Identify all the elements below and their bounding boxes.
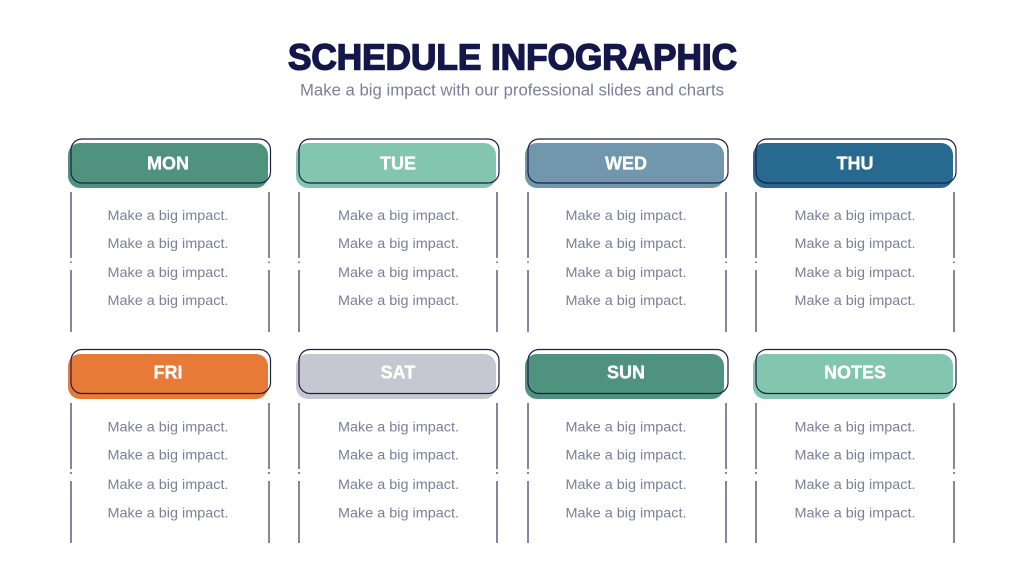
text block [338, 208, 459, 308]
header: SUN: SUN [607, 362, 645, 382]
side lines [528, 403, 726, 543]
text block: Make a big impact. [794, 265, 916, 280]
panel: NOTES [753, 350, 956, 543]
text block: Make a big impact. [338, 477, 459, 492]
text block: Make a big impact. [338, 506, 459, 520]
text block [794, 208, 916, 308]
text block: Make a big impact. [566, 208, 686, 223]
header: TUE: TUE [380, 154, 416, 174]
text block: Make a big impact. [338, 293, 459, 308]
panel: MON [68, 139, 270, 332]
header: SUN [525, 350, 728, 399]
header: NOTES: NOTES [824, 362, 886, 382]
text block: Make a big impact. [108, 265, 228, 280]
header: WED: WED [605, 154, 647, 174]
text block: Make a big impact. [794, 448, 916, 462]
text block: Make a big impact. [794, 420, 916, 434]
header: MON [68, 139, 270, 188]
text block: Make a big impact. [566, 265, 686, 280]
text block: Make a big impact. [338, 420, 459, 434]
side lines [299, 192, 497, 332]
header: THU: THU [836, 154, 874, 174]
text block: Make a big impact. [108, 477, 228, 492]
subtitle: Make a big impact with our professional slides and charts [300, 82, 724, 100]
text block: Make a big impact. [566, 448, 686, 462]
header: WED [525, 139, 728, 188]
text block: Make a big impact. [108, 293, 228, 308]
panel: TUE [296, 139, 499, 332]
text block: Make a big impact. [338, 236, 459, 251]
text block: Make a big impact. [566, 420, 686, 434]
header: MON: MON [147, 154, 189, 174]
header: TUE [296, 139, 499, 188]
text block: Make a big impact. [108, 420, 228, 434]
panel: SUN [525, 350, 728, 543]
text block [338, 420, 459, 520]
side lines [528, 192, 726, 332]
title: SCHEDULE INFOGRAPHIC [288, 36, 737, 78]
header: FRI: FRI [154, 362, 182, 382]
text block [566, 208, 686, 308]
header: FRI [68, 350, 270, 399]
text block [108, 420, 228, 520]
side lines [756, 192, 954, 332]
text block: Make a big impact. [566, 293, 686, 308]
text block [794, 420, 916, 520]
header: SAT: SAT [381, 362, 415, 382]
header: NOTES [753, 350, 956, 399]
text block: Make a big impact. [794, 477, 916, 492]
text block: Make a big impact. [794, 208, 916, 223]
side lines [71, 192, 269, 332]
text block: Make a big impact. [108, 208, 228, 223]
header: SAT [296, 350, 499, 399]
text block: Make a big impact. [794, 236, 916, 251]
text block [108, 208, 228, 308]
text block: Make a big impact. [108, 448, 228, 462]
panel: FRI [68, 350, 270, 543]
panel: THU [753, 139, 956, 332]
panel: WED [525, 139, 728, 332]
header: THU [753, 139, 956, 188]
text block: Make a big impact. [794, 506, 916, 520]
text block: Make a big impact. [794, 293, 916, 308]
text block: Make a big impact. [566, 506, 686, 520]
side lines [71, 403, 269, 543]
text block [566, 420, 686, 520]
text block: Make a big impact. [566, 236, 686, 251]
side lines [756, 403, 954, 543]
text block: Make a big impact. [108, 506, 228, 520]
text block: Make a big impact. [338, 448, 459, 462]
text block: Make a big impact. [566, 477, 686, 492]
panel: SAT [296, 350, 499, 543]
side lines [299, 403, 497, 543]
text block: Make a big impact. [108, 236, 228, 251]
text block: Make a big impact. [338, 208, 459, 223]
text block: Make a big impact. [338, 265, 459, 280]
